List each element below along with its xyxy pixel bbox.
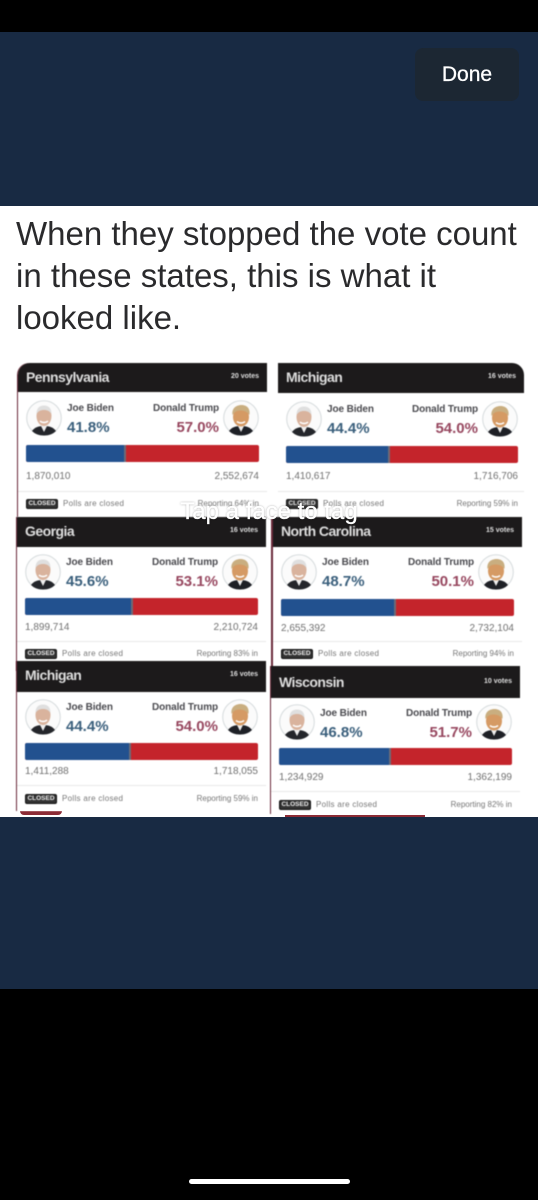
header: Wisconsin: [271, 666, 520, 698]
remnant of hidden bar below Wisconsin: [285, 815, 425, 817]
Biden name: Joe Biden: [322, 557, 369, 568]
post heading: in these states, this is what it: [16, 257, 436, 294]
Biden portrait: [286, 401, 322, 438]
vote share bar: [26, 445, 259, 462]
photo tag hint: Tap a face to tag: [180, 498, 358, 525]
vote share bar: [286, 446, 518, 463]
Biden percent: 46.8%: [320, 724, 363, 741]
top navy band: [0, 32, 538, 206]
Trump portrait: [476, 704, 512, 740]
Trump votes: 2,732,104: [470, 623, 514, 634]
Trump percent: 50.1%: [431, 573, 474, 590]
Biden votes: 1,870,010: [26, 471, 70, 482]
polls status: Polls are closed: [62, 794, 123, 803]
Trump percent: 57.0%: [176, 419, 219, 436]
Trump portrait: [222, 699, 258, 736]
Trump votes: 1,718,055: [214, 766, 258, 777]
panel: North Carolina: [273, 517, 522, 671]
closed badge: CLOSED: [27, 650, 55, 657]
post heading: When they stopped the vote count: [16, 215, 517, 252]
vote share bar: [281, 599, 514, 616]
header: Pennsylvania: Pennsylvania: [26, 369, 109, 385]
header: Michigan: [17, 661, 266, 692]
header: Michigan: 16 votes: [488, 373, 516, 380]
Biden votes: 1,410,617: [286, 471, 330, 482]
header: Georgia: 16 votes: [230, 527, 258, 534]
Biden votes: 1,411,288: [25, 766, 69, 777]
header: Pennsylvania: 20 votes: [231, 373, 259, 380]
reporting status: Reporting 83% in: [197, 649, 258, 658]
header: Wisconsin: 10 votes: [484, 678, 512, 685]
panel: Georgia: [17, 517, 266, 671]
Biden percent: 48.7%: [322, 573, 365, 590]
Trump name: Donald Trump: [152, 557, 218, 568]
Biden name: Joe Biden: [66, 702, 113, 713]
closed badge: [25, 794, 57, 804]
Biden percent: 44.4%: [66, 718, 109, 735]
header: Michigan: 16 votes: [230, 671, 258, 678]
Trump percent: 54.0%: [435, 420, 478, 437]
remnant of hidden bar below Michigan: [20, 811, 62, 815]
panel: Michigan top: [278, 363, 524, 517]
Biden name: Joe Biden: [67, 403, 114, 414]
polls status: Polls are closed: [62, 649, 123, 658]
header: Pennsylvania: [18, 363, 267, 392]
header: North Carolina: [273, 517, 522, 547]
reporting status: Reporting 94% in: [453, 649, 514, 658]
Trump percent: 53.1%: [175, 573, 218, 590]
Trump name: Donald Trump: [152, 702, 218, 713]
header: Georgia: Georgia: [25, 523, 74, 539]
closed badge: CLOSED: [28, 500, 56, 507]
closed badge: CLOSED: [288, 500, 316, 507]
reporting status: Reporting 82% in: [451, 800, 512, 809]
header: North Carolina: North Carolina: [281, 523, 371, 539]
Trump name: Donald Trump: [412, 404, 478, 415]
polls status: Polls are closed: [323, 499, 384, 508]
Biden portrait: [24, 554, 62, 590]
post heading: [16, 215, 517, 336]
header: Michigan: Michigan: [286, 369, 342, 385]
Biden votes: 1,899,714: [25, 622, 70, 633]
panel: Michigan bottom: [17, 661, 266, 811]
Trump portrait: [222, 554, 258, 590]
Trump votes: 2,210,724: [214, 622, 258, 633]
closed badge: [25, 649, 57, 659]
Trump votes: 1,362,199: [468, 772, 512, 783]
Biden name: Joe Biden: [320, 708, 367, 719]
Trump votes: 1,716,706: [474, 471, 518, 482]
closed badge: CLOSED: [281, 801, 309, 808]
Biden portrait: [26, 400, 62, 436]
Trump name: Donald Trump: [153, 403, 219, 414]
Biden name: Joe Biden: [327, 404, 374, 415]
panel: Wisconsin: [271, 666, 520, 814]
post heading: looked like.: [16, 299, 181, 336]
Trump portrait: [482, 401, 518, 438]
header: North Carolina: 15 votes: [486, 527, 514, 534]
panel: Pennsylvania: [18, 363, 267, 517]
closed badge: [281, 649, 313, 659]
Trump percent: 54.0%: [175, 718, 218, 735]
Biden portrait: [24, 699, 62, 736]
Biden name: Joe Biden: [66, 557, 113, 568]
reporting status: Reporting 59% in: [197, 794, 258, 803]
header: Georgia: [17, 517, 266, 547]
Trump percent: 51.7%: [429, 724, 472, 741]
Biden portrait: [280, 554, 318, 590]
Biden percent: 44.4%: [327, 420, 370, 437]
reporting status: Reporting 59% in: [457, 499, 518, 508]
Done button: [415, 48, 519, 101]
Trump name: Donald Trump: [406, 708, 472, 719]
Biden percent: 45.6%: [66, 573, 109, 590]
polls status: Polls are closed: [63, 499, 124, 508]
Done button: Done: [442, 63, 492, 86]
Biden portrait: [278, 704, 316, 740]
Trump portrait: [478, 554, 514, 590]
vote share bar: [25, 743, 258, 760]
white post background: [0, 206, 538, 817]
reporting status: Reporting 64% in: [198, 499, 259, 508]
closed badge: [286, 499, 318, 509]
Biden votes: 1,234,929: [279, 772, 324, 783]
closed badge: CLOSED: [283, 650, 311, 657]
vote share bar: [279, 748, 512, 765]
election results screenshot: [15, 362, 525, 817]
header: Michigan: [278, 363, 524, 393]
closed badge: CLOSED: [27, 795, 55, 802]
polls status: Polls are closed: [316, 800, 377, 809]
Biden percent: 41.8%: [67, 419, 110, 436]
Trump portrait: [222, 400, 260, 436]
closed badge: [26, 499, 58, 509]
vote share bar: [25, 598, 258, 615]
Trump votes: 2,552,674: [214, 471, 259, 482]
closed badge: [279, 800, 311, 810]
header: Wisconsin: Wisconsin: [279, 674, 344, 690]
bottom navy band: [0, 817, 538, 989]
Biden votes: 2,655,392: [281, 623, 326, 634]
header: Michigan: Michigan: [25, 667, 81, 683]
Trump name: Donald Trump: [408, 557, 474, 568]
polls status: Polls are closed: [318, 649, 379, 658]
home indicator: [189, 1179, 350, 1184]
